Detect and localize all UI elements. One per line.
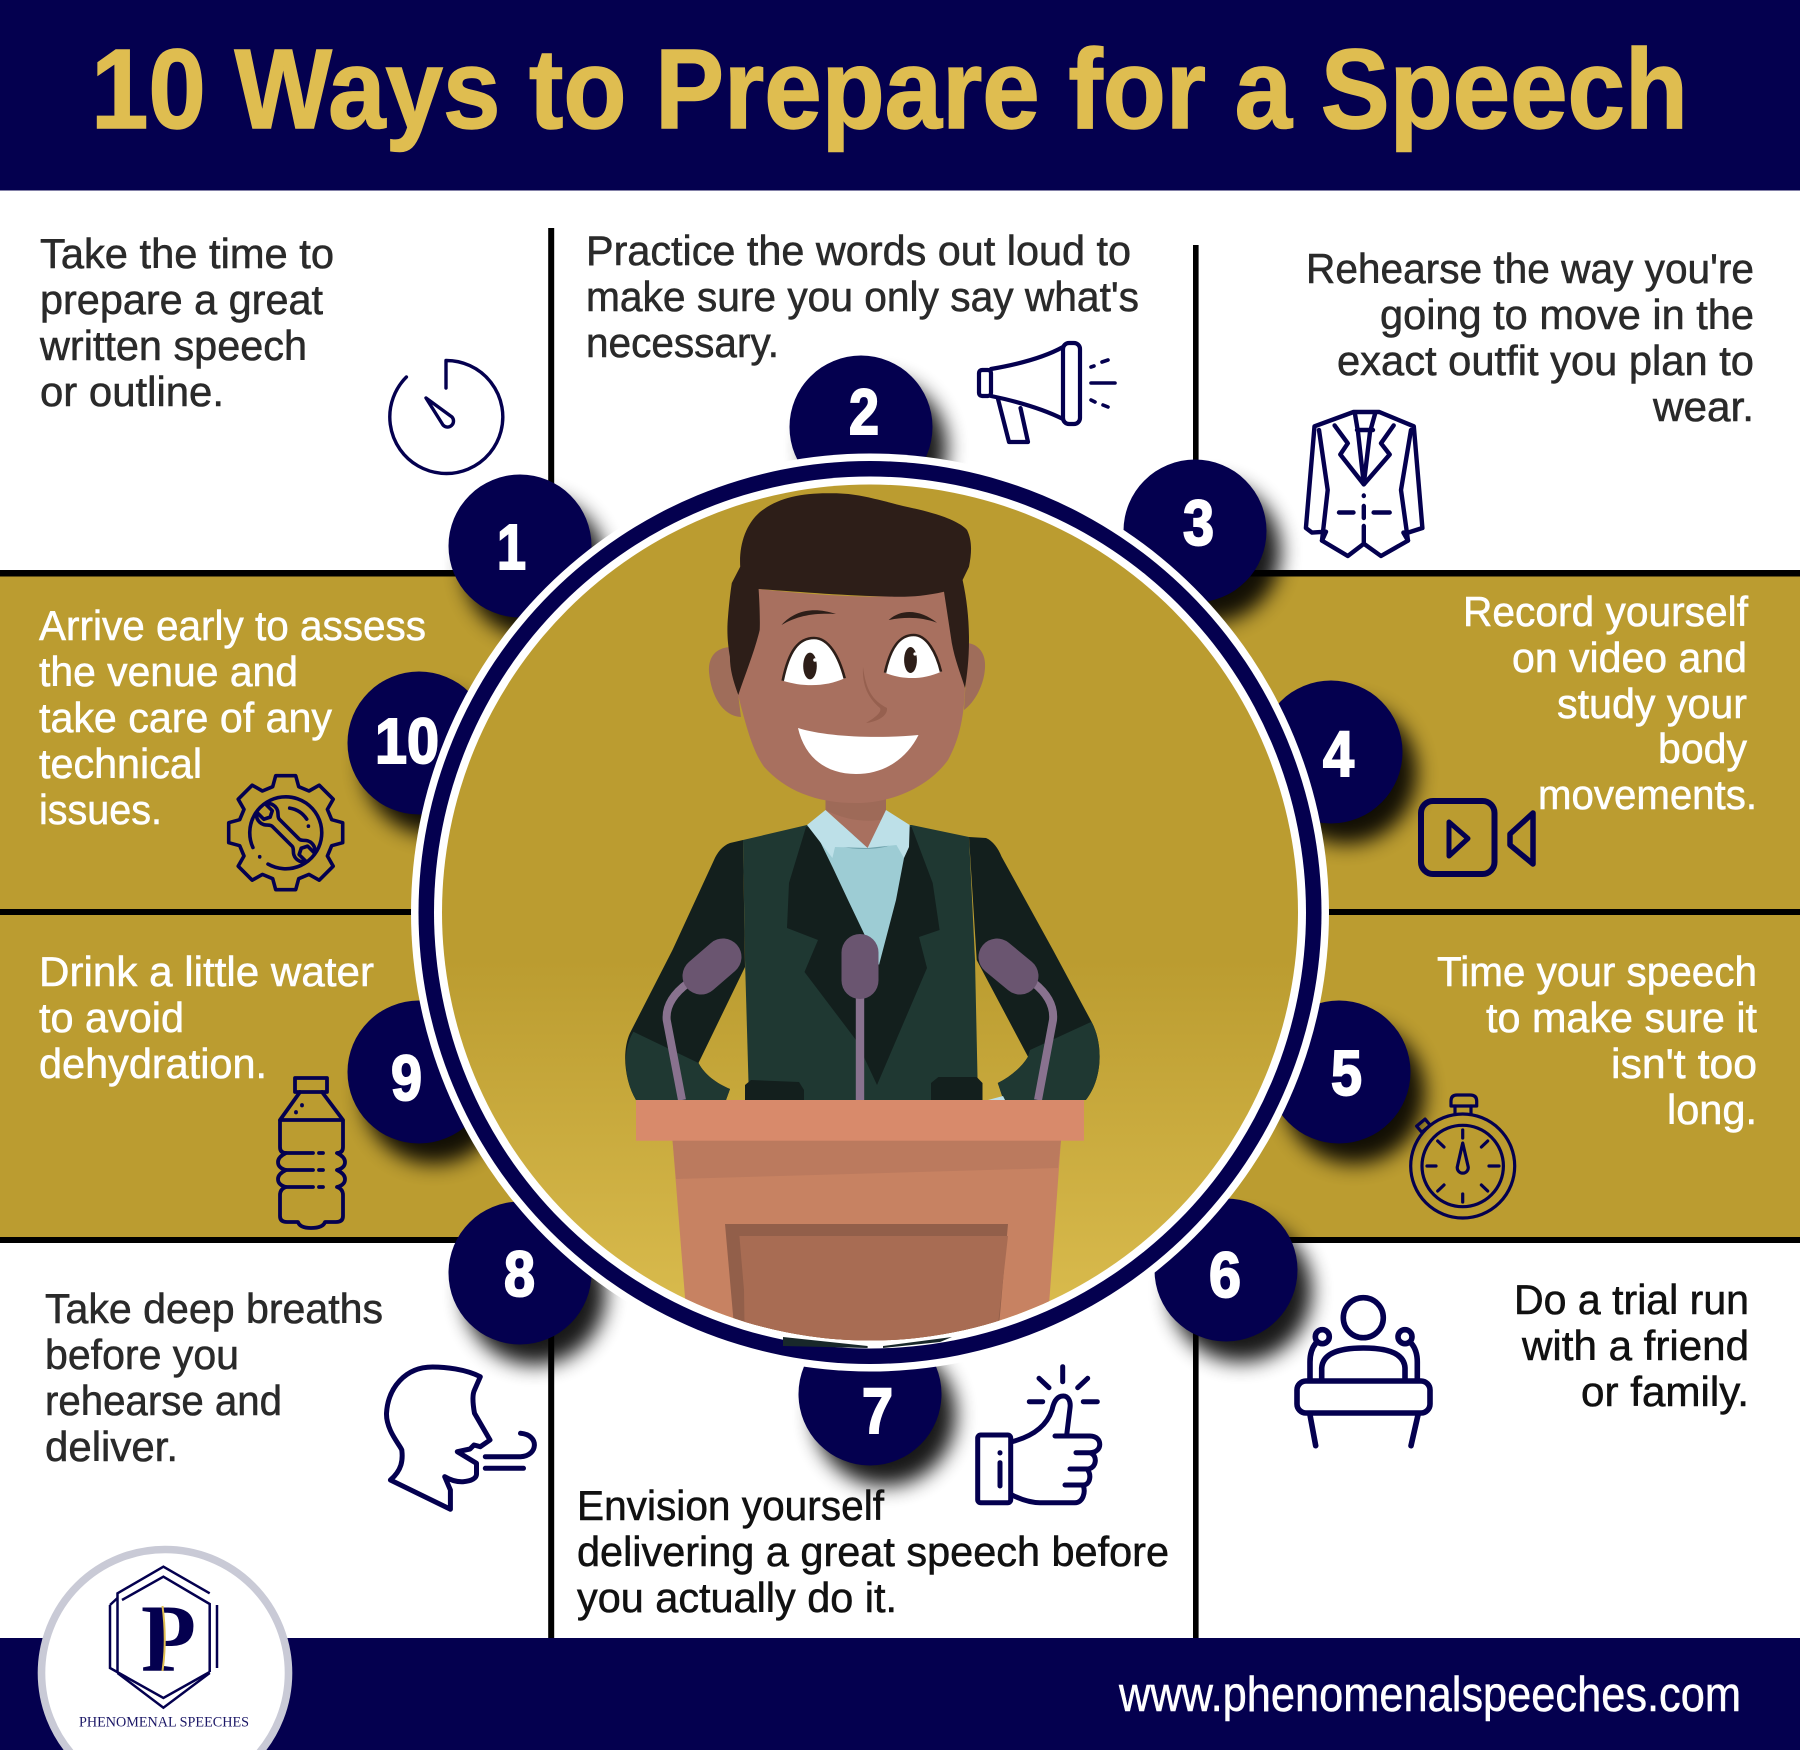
panel 5: time your speech xyxy=(1411,948,1757,1218)
text 4: Record yourself xyxy=(1463,588,1748,635)
icon: stopwatch xyxy=(1411,1095,1515,1218)
badge 6: 6 xyxy=(1209,1239,1241,1311)
text 4: movements. xyxy=(1538,771,1757,818)
text 3: going to move in the xyxy=(1380,291,1754,338)
text 5: Time your speech xyxy=(1437,948,1757,995)
badge 10 xyxy=(348,672,490,814)
panel 7: envision xyxy=(577,1367,1169,1621)
icon: gear and wrench xyxy=(229,776,343,890)
text 4: body xyxy=(1658,725,1747,772)
badge 9: 9 xyxy=(391,1042,422,1114)
text 4 xyxy=(1463,588,1757,818)
text 3: Rehearse the way you're xyxy=(1306,245,1754,292)
torso jacket xyxy=(743,825,978,1100)
badge 8 xyxy=(448,1202,592,1344)
icon: video camera xyxy=(1421,801,1533,874)
icon: jacket xyxy=(1306,412,1422,556)
badge 3: 3 xyxy=(1183,487,1214,559)
panel 10: arrive early xyxy=(39,602,426,890)
text 10: issues. xyxy=(39,786,162,833)
text 1: or outline. xyxy=(40,368,224,415)
badge 9 xyxy=(348,1000,490,1144)
panel 6: trial run xyxy=(1297,1276,1749,1446)
podium xyxy=(636,1100,1084,1360)
text 8: before you xyxy=(45,1331,239,1378)
text 3: exact outfit you plan to xyxy=(1337,337,1754,384)
text 9: dehydration. xyxy=(39,1040,267,1087)
badge 2 xyxy=(790,356,932,498)
icon: timer xyxy=(390,360,503,473)
badge 5: 5 xyxy=(1331,1037,1362,1109)
text 2 xyxy=(586,227,1139,366)
speaker illustration xyxy=(625,493,1100,1360)
text 1 xyxy=(39,230,334,415)
badge 7 xyxy=(798,1322,942,1466)
text 5: to make sure it xyxy=(1486,994,1757,1041)
badge 2: 2 xyxy=(849,376,879,448)
face xyxy=(738,589,965,803)
text 10: the venue and xyxy=(39,648,298,695)
badge 1: 1 xyxy=(497,511,526,583)
badge 7: 7 xyxy=(862,1375,893,1447)
icon: head breathing xyxy=(386,1367,534,1509)
text 8 xyxy=(45,1285,383,1470)
central circle with speaker xyxy=(411,454,1329,1372)
eyes xyxy=(783,638,845,685)
shirt xyxy=(820,825,904,965)
text 4: on video and xyxy=(1512,634,1747,681)
text 10: Arrive early to assess xyxy=(39,602,426,649)
jacket lapels xyxy=(787,827,940,1085)
logo badge xyxy=(42,1550,288,1750)
hair xyxy=(727,493,971,695)
text 1: Take the time to xyxy=(40,230,334,277)
text 3: wear. xyxy=(1652,383,1754,430)
panel 2: practice out loud xyxy=(586,227,1139,442)
text 8: deliver. xyxy=(45,1423,178,1470)
badge 5 xyxy=(1268,1000,1410,1144)
text 10 xyxy=(39,602,426,833)
text 6: Do a trial run xyxy=(1514,1276,1749,1323)
icon: thumbs up xyxy=(978,1367,1100,1503)
icon: water bottle xyxy=(278,1078,345,1228)
text 9: to avoid xyxy=(39,994,184,1041)
left ear xyxy=(709,647,741,717)
eyebrows xyxy=(782,610,937,625)
right arm xyxy=(969,837,1100,1100)
nose xyxy=(863,667,887,723)
panel 3: rehearse movement xyxy=(1306,245,1754,556)
badge 4: 4 xyxy=(1323,718,1354,790)
text 6 xyxy=(1514,1276,1749,1415)
neck xyxy=(826,810,882,848)
badge 4 xyxy=(1260,680,1402,824)
feet below podium xyxy=(783,1337,952,1348)
text 7 xyxy=(577,1482,1169,1621)
text 6: with a friend xyxy=(1521,1322,1749,1369)
microphones xyxy=(667,952,1053,1100)
text 4: study your xyxy=(1557,680,1747,727)
smile xyxy=(798,728,918,774)
badge 8: 8 xyxy=(504,1238,535,1310)
hands and cuffs xyxy=(745,1077,982,1100)
text 2: Practice the words out loud to xyxy=(586,227,1131,274)
panel 1: prepare a speech xyxy=(39,230,503,473)
text 10: technical xyxy=(39,740,202,787)
text 2: make sure you only say what's xyxy=(586,273,1139,320)
text 5: isn't too xyxy=(1611,1040,1757,1087)
text 1: written speech xyxy=(39,322,307,369)
text 5 xyxy=(1437,948,1757,1133)
badge 3 xyxy=(1124,460,1266,602)
right ear xyxy=(964,643,985,710)
shirt collar xyxy=(807,810,910,858)
header banner xyxy=(0,0,1800,190)
icon: person at podium xyxy=(1297,1298,1430,1446)
panel 9: drink water xyxy=(39,948,374,1228)
icon: megaphone xyxy=(979,343,1115,442)
text 7: delivering a great speech before xyxy=(577,1528,1169,1575)
title: 10 Ways to Prepare for a Speech xyxy=(91,26,1688,152)
text 10: take care of any xyxy=(39,694,332,741)
left arm xyxy=(625,840,745,1100)
number badges xyxy=(348,356,1410,1466)
panel 4: record yourself xyxy=(1421,588,1757,874)
text 1: prepare a great xyxy=(40,276,323,323)
text 2: necessary. xyxy=(586,319,779,366)
badge shadows xyxy=(363,377,1425,1486)
text 8: rehearse and xyxy=(45,1377,282,1424)
gold band xyxy=(0,574,1800,1239)
panel 8: deep breaths xyxy=(45,1285,534,1509)
badge 1 xyxy=(448,474,592,618)
badge 6 xyxy=(1154,1198,1298,1342)
text 9: Drink a little water xyxy=(39,948,374,995)
text 8: Take deep breaths xyxy=(45,1285,383,1332)
logo hexagon xyxy=(110,1567,217,1708)
text 9 xyxy=(39,948,374,1087)
text 7: you actually do it. xyxy=(577,1574,897,1621)
text 3 xyxy=(1306,245,1754,430)
text 5: long. xyxy=(1667,1086,1757,1133)
logo letter P: P xyxy=(141,1585,196,1692)
text 6: or family. xyxy=(1581,1368,1749,1415)
badge 10: 10 xyxy=(375,705,439,777)
text 7: Envision yourself xyxy=(577,1482,884,1529)
footer banner xyxy=(0,1638,1800,1750)
logo name: PHENOMENAL SPEECHES xyxy=(79,1714,249,1730)
